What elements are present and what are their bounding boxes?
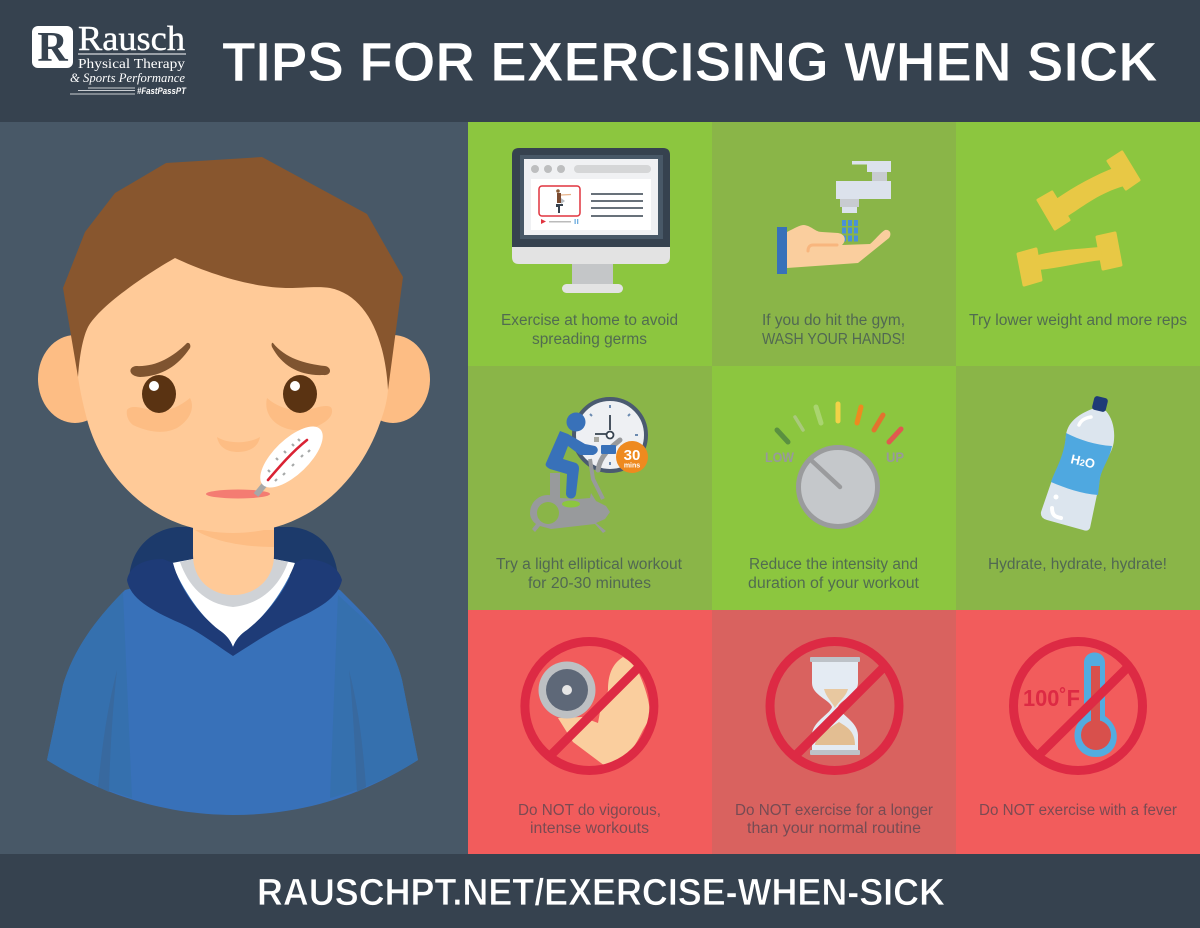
sleeve shading [47, 592, 418, 798]
panel: hydrate [956, 366, 1200, 610]
icon: crossed-out dumbbell and arm [525, 642, 654, 770]
title: TIPS FOR EXERCISING WHEN SICK [222, 30, 1158, 93]
icon: intensity dial [765, 404, 904, 526]
caption: intense workouts [530, 820, 649, 837]
caption [501, 312, 678, 348]
logo [32, 19, 187, 97]
icon: water bottle [1041, 396, 1114, 531]
caption: Try a light elliptical workout [496, 556, 683, 573]
face [78, 258, 388, 533]
badge: 30 mins: mins [624, 462, 640, 470]
icon: water bottle: H2O [1069, 451, 1097, 471]
caption: for 20-30 minutes [528, 575, 651, 592]
icon: intensity dial: LOW [765, 450, 794, 465]
footer url: RAUSCHPT.NET/EXERCISE-WHEN-SICK [257, 872, 946, 914]
mouth [206, 490, 270, 498]
caption: Do NOT exercise with a fever [979, 802, 1177, 819]
icon: faucet and hand [777, 161, 891, 274]
eyebrows [130, 343, 190, 377]
caption [748, 556, 920, 592]
caption: spreading germs [532, 331, 647, 348]
footer bar [0, 854, 1200, 928]
ears [38, 335, 112, 423]
badge: 30 mins [616, 441, 648, 473]
eyes [142, 375, 317, 413]
caption: WASH YOUR HANDS! [762, 331, 905, 348]
icon: crossed-out thermometer [1014, 642, 1142, 770]
panel: no exercising with fever [956, 610, 1200, 854]
panel: sick boy illustration [0, 122, 468, 854]
logo: #FastPassPT [137, 86, 187, 97]
panel: light elliptical [468, 366, 712, 610]
panel: reduce intensity [712, 366, 956, 610]
under-eye circles [127, 398, 192, 432]
panel: exercise at home [468, 122, 712, 366]
shirt collar [180, 559, 288, 607]
panel: wash your hands [712, 122, 956, 366]
caption: Exercise at home to avoid [501, 312, 678, 329]
oral thermometer [251, 417, 332, 497]
badge: 30 mins: 30 [624, 447, 640, 464]
caption [735, 802, 933, 837]
hair [63, 157, 403, 390]
caption: If you do hit the gym, [762, 312, 905, 329]
panel: no vigorous workouts [468, 610, 712, 854]
nose [217, 437, 260, 452]
icon: intensity dial: UP [886, 450, 904, 465]
icon: crossed-out thermometer: 100˚F [1023, 685, 1080, 711]
icon: clock [574, 399, 646, 471]
hood front [127, 559, 342, 656]
caption [496, 556, 683, 592]
caption: Do NOT do vigorous, [518, 802, 661, 819]
header bar [0, 0, 1200, 122]
caption: Hydrate, hydrate, hydrate! [988, 556, 1167, 573]
neck [193, 525, 274, 595]
caption: duration of your workout [748, 575, 920, 592]
caption: than your normal routine [747, 820, 921, 837]
hood back [129, 527, 338, 580]
caption: Reduce the intensity and [749, 556, 918, 573]
caption: Do NOT exercise for a longer [735, 802, 933, 819]
icon: crossed-out hourglass [770, 642, 899, 770]
logo: R [37, 25, 68, 71]
logo: Rausch [78, 19, 186, 58]
icon: dumbbells [1018, 152, 1139, 285]
caption [762, 312, 905, 348]
icon: elliptical machine [530, 437, 620, 533]
hoodie body [47, 560, 418, 815]
panel: no longer routine [712, 610, 956, 854]
logo: & Sports Performance [70, 70, 185, 85]
panel: lower weight [956, 122, 1200, 366]
icon: person exercising [546, 412, 616, 498]
sleeve creases [98, 670, 366, 792]
caption: Try lower weight and more reps [969, 312, 1187, 329]
icon: computer monitor [512, 148, 670, 293]
caption [518, 802, 661, 837]
neck shadow [195, 530, 274, 547]
white shirt [172, 559, 295, 647]
logo: Physical Therapy [78, 57, 185, 72]
